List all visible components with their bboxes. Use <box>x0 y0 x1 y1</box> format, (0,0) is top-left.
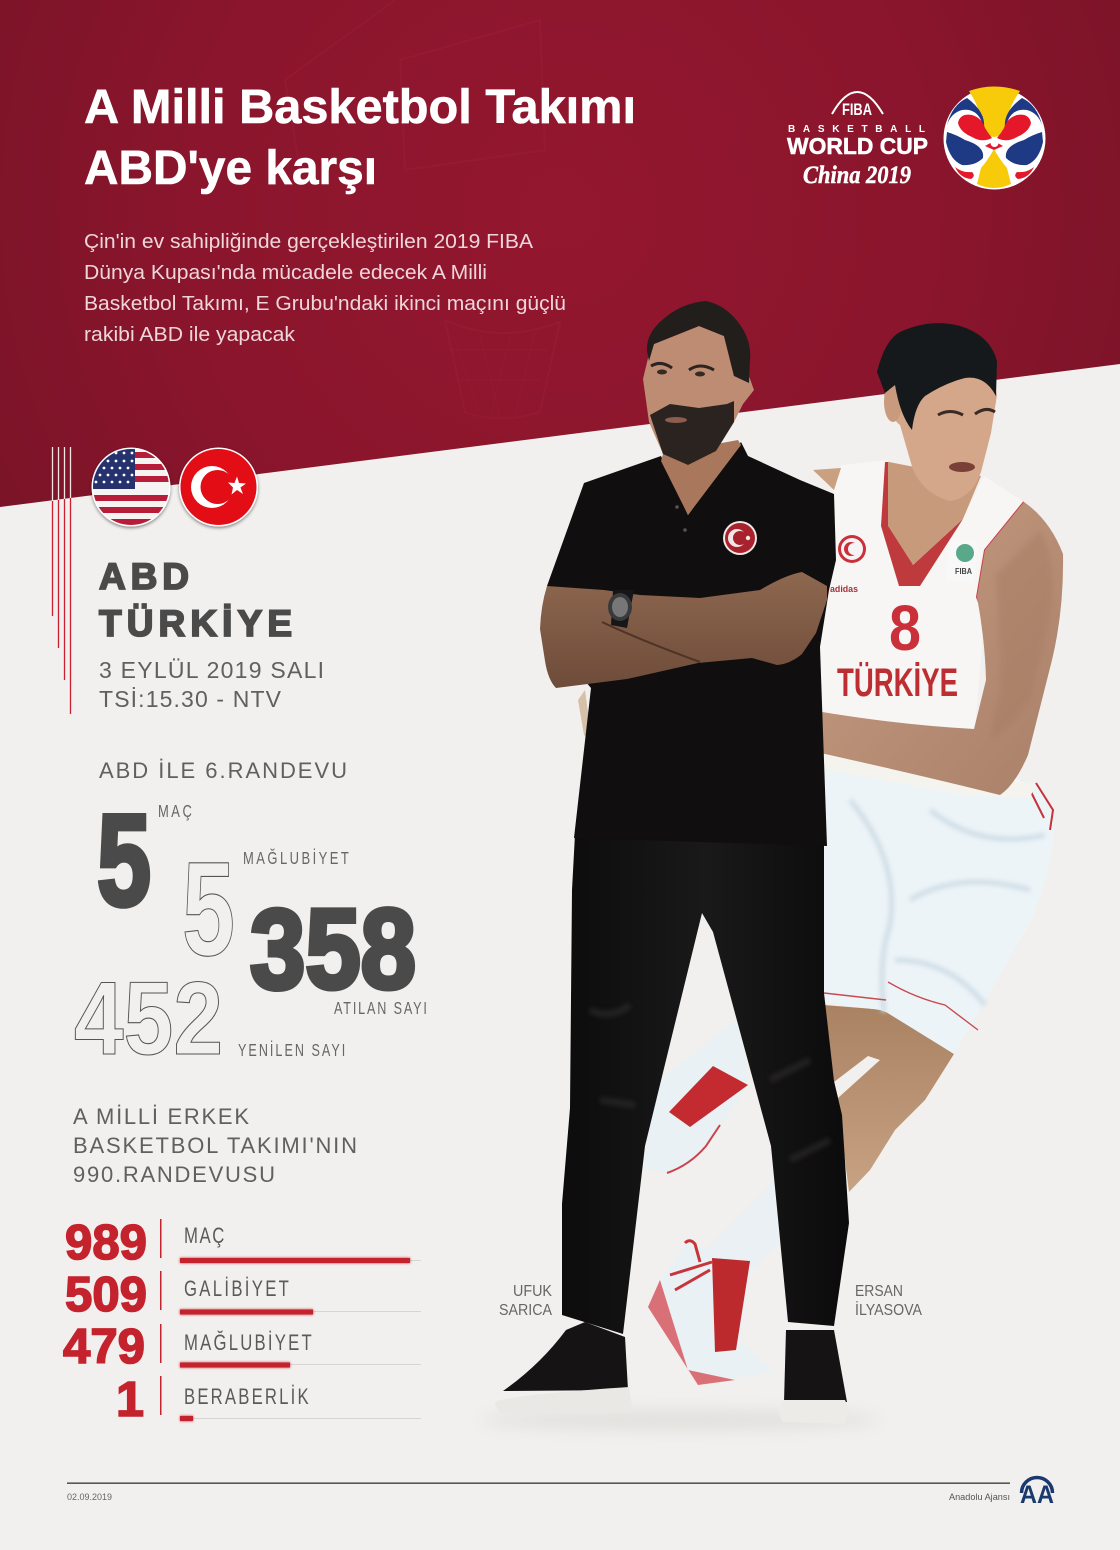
section heading: 990th game: A MİLLİ ERKEK <box>73 1104 249 1129</box>
player hair <box>877 323 997 430</box>
caption: Ufuk Sarıca: UFUK <box>513 1283 553 1300</box>
waistband <box>820 755 1035 798</box>
player head <box>884 345 997 501</box>
coach shirt <box>547 442 836 846</box>
matchup heading <box>99 556 292 644</box>
shorts <box>820 758 1054 1054</box>
shoulder left <box>813 468 841 490</box>
player: Ersan İlyasova <box>643 323 1063 1385</box>
jersey <box>816 460 1030 790</box>
player mouth <box>949 462 975 472</box>
stat: 5 losses: MAĞLUBİYET <box>243 847 349 869</box>
stat: 5 games: 5 <box>97 787 151 933</box>
coach eyes <box>651 363 714 370</box>
section heading: 990th game <box>73 1104 357 1187</box>
FIBA World Cup wordmark: China 2019 <box>803 162 911 189</box>
intro paragraph <box>84 230 566 346</box>
jersey armhole trim <box>977 502 1024 616</box>
row: draws: 1 <box>116 1373 144 1427</box>
match date and channel: 3 EYLÜL 2019 SALI <box>99 657 324 683</box>
footer rule <box>67 1482 1010 1484</box>
neck <box>884 461 981 565</box>
front sneaker laces <box>712 1258 750 1352</box>
stat: 358 points scored: 358 <box>250 886 416 1012</box>
coach neck <box>661 440 741 515</box>
coach: Ufuk Sarıca <box>495 301 849 1424</box>
row: losses <box>63 1320 421 1374</box>
jersey name: TÜRKİYE <box>837 660 958 705</box>
shorts trim <box>824 982 978 1030</box>
intro paragraph: Dünya Kupası'nda mücadele edecek A Milli <box>84 261 487 284</box>
shirt buttons <box>675 505 687 532</box>
forearm fold <box>602 622 700 662</box>
coach beard <box>650 401 734 465</box>
floor shadow <box>480 1410 880 1430</box>
FIBA World Cup wordmark: WORLD CUP <box>787 133 928 159</box>
row: wins <box>65 1268 421 1322</box>
shirt patch <box>723 521 757 555</box>
shorts folds <box>850 800 1045 1012</box>
gap between legs <box>834 1056 880 1098</box>
intro paragraph: Basketbol Takımı, E Grubu'ndaki ikinci maçını güçlü <box>84 292 566 315</box>
FIBA emblem <box>944 86 1046 190</box>
jersey red v-neck <box>881 462 963 586</box>
icon: Turkey flag <box>179 448 258 526</box>
row: games: 989 <box>65 1216 147 1270</box>
stat: 358 points scored: ATILAN SAYI <box>334 999 427 1019</box>
caption: Ufuk Sarıca <box>499 1283 553 1319</box>
trouser highlights <box>590 1005 830 1160</box>
decorative vertical lines <box>52 447 70 714</box>
left shoe <box>495 1322 633 1414</box>
row: draws <box>116 1373 421 1427</box>
player eyes <box>938 409 995 415</box>
matchup heading: TÜRKİYE <box>99 603 292 644</box>
row: losses: MAĞLUBİYET <box>184 1330 312 1356</box>
lower leg and sneakers <box>643 1018 790 1385</box>
coach mouth <box>665 417 687 423</box>
coach trousers <box>562 834 849 1334</box>
section heading: 990th game: BASKETBOL TAKIMI'NIN <box>73 1133 357 1158</box>
coach hair <box>647 301 750 383</box>
right shoe <box>778 1330 849 1424</box>
stat: 5 games: MAÇ <box>158 802 192 822</box>
upper leg <box>824 1005 954 1192</box>
faint basketball hoop in header <box>285 0 560 418</box>
title: A Milli Basketbol Takımı <box>84 81 636 134</box>
icon: Anadolu Agency logo: AA <box>1020 1481 1054 1509</box>
stat: 452 points conceded <box>74 961 345 1077</box>
caption: Ersan İlyasova: İLYASOVA <box>855 1301 923 1319</box>
jersey badge <box>838 535 866 563</box>
footer date: 02.09.2019 <box>67 1492 112 1502</box>
stat: 5 losses: 5 <box>182 835 235 984</box>
section heading: 6th meeting: ABD İLE 6.RANDEVU <box>99 758 347 783</box>
footer credit: Anadolu Ajansı <box>949 1492 1010 1503</box>
row: games: MAÇ <box>184 1224 224 1249</box>
rear sneaker laces <box>669 1066 748 1127</box>
match date and channel: TSİ:15.30 - NTV <box>99 686 282 712</box>
overall record bars <box>63 1216 421 1427</box>
rear sneaker <box>643 1018 748 1173</box>
player ear <box>884 382 902 422</box>
icon: USA flag <box>90 448 172 526</box>
row: wins: GALİBİYET <box>184 1276 289 1302</box>
section heading: 990th game: 990.RANDEVUSU <box>73 1162 275 1187</box>
intro paragraph: Çin'in ev sahipliğinde gerçekleştirilen 2019 FIBA <box>84 230 533 253</box>
stat: 5 losses <box>182 835 349 984</box>
caption: Ersan İlyasova <box>855 1283 923 1319</box>
title: ABD'ye karşı <box>84 142 377 195</box>
stat: 452 points conceded: YENİLEN SAYI <box>238 1040 345 1061</box>
rear sneaker sole edge <box>667 1125 720 1173</box>
player arm <box>816 502 1063 795</box>
coach arms <box>540 572 827 688</box>
FIBA patch: FIBA <box>955 567 972 576</box>
front sneaker sole <box>648 1280 735 1385</box>
coach face <box>643 326 754 465</box>
jersey number: 8 <box>889 592 921 664</box>
FIBA patch <box>946 539 978 583</box>
front sneaker stripes <box>670 1241 712 1290</box>
matchup heading: ABD <box>99 556 189 597</box>
row: wins: 509 <box>65 1268 147 1322</box>
hand behind shirt <box>578 690 592 742</box>
FIBA World Cup wordmark: BASKETBALL <box>788 124 925 135</box>
caption: Ufuk Sarıca: SARICA <box>499 1302 553 1319</box>
match date and channel <box>99 657 324 712</box>
row: draws: BERABERLİK <box>184 1384 309 1410</box>
stat: 452 points conceded: 452 <box>74 961 223 1077</box>
caption: Ersan İlyasova: ERSAN <box>855 1283 903 1300</box>
watch <box>608 590 634 628</box>
row: games <box>65 1216 421 1270</box>
FIBA World Cup wordmark: FIBA <box>842 100 872 119</box>
intro paragraph: rakibi ABD ile yapacak <box>84 323 296 346</box>
red diagonal header panel <box>0 0 1120 507</box>
adidas mark: adidas <box>830 584 858 594</box>
row: losses: 479 <box>63 1320 145 1374</box>
title <box>84 81 636 195</box>
FIBA World Cup wordmark <box>787 92 928 189</box>
front sneaker <box>648 1243 775 1383</box>
lower sock <box>706 1179 790 1269</box>
